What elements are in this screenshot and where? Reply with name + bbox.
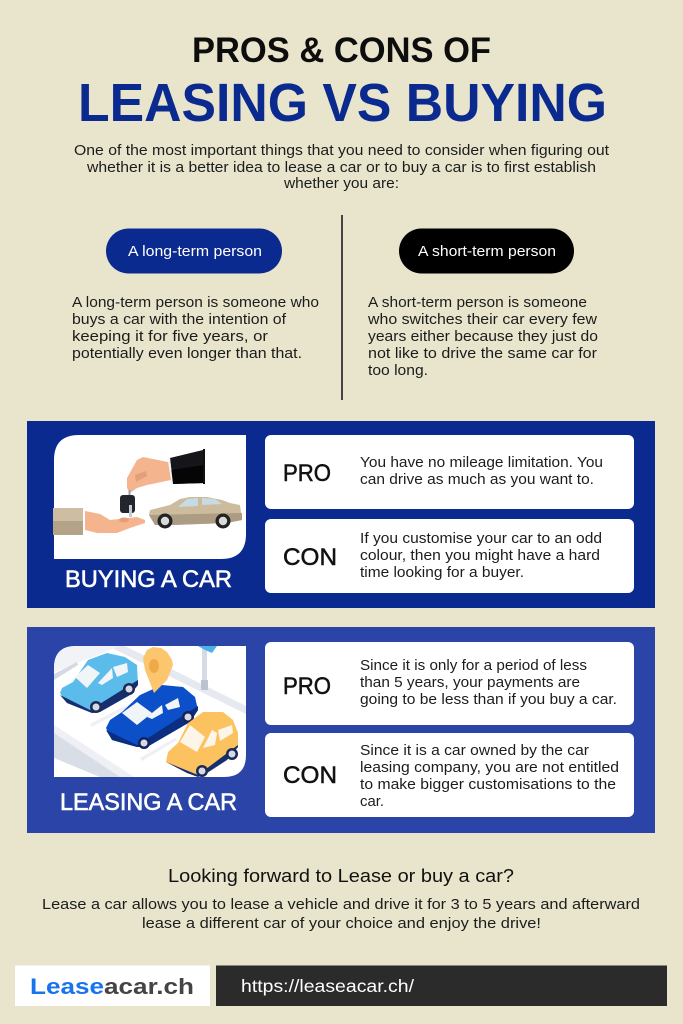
car — [149, 497, 242, 528]
card: leasing con: leasing company, you are not entitled — [360, 760, 619, 776]
panel heading: BUYING A CAR — [65, 566, 232, 593]
card: leasing pro: Since it is only for a period of less — [360, 658, 587, 674]
website url bar: https://leaseacar.ch/ — [241, 976, 414, 996]
dark blue car — [106, 685, 198, 749]
long-term description: potentially even longer than that. — [72, 345, 302, 362]
closing question: Looking forward to Lease or buy a car? — [168, 866, 514, 886]
card: buying pro: You have no mileage limitation. You — [360, 455, 603, 471]
intro text: One of the most important things that you need to consider when figuring out — [74, 142, 610, 159]
intro text — [74, 142, 610, 192]
column divider — [341, 215, 343, 400]
illustration: parked cars with location pin — [54, 646, 246, 777]
card: buying con: CON — [283, 544, 337, 571]
illustration: hands exchanging car key — [53, 435, 246, 559]
long-term description: A long-term person is someone who — [72, 294, 319, 311]
pill: short-term person — [399, 228, 574, 274]
card: buying con: time looking for a buyer. — [360, 565, 524, 581]
light blue car — [60, 653, 138, 713]
intro text: whether it is a better idea to lease a car or to buy a car is to first establish — [86, 159, 596, 176]
short-term description — [367, 294, 598, 379]
closing text: lease a different car of your choice and enjoy the drive! — [142, 915, 541, 932]
card: buying pro — [265, 435, 634, 509]
card: buying con: colour, then you might have a hard — [360, 548, 600, 564]
panel: buying a car — [27, 421, 655, 608]
yellow car — [166, 712, 238, 777]
long-term description: buys a car with the intention of — [72, 311, 287, 328]
pill: short-term person: A short-term person — [418, 243, 556, 260]
short-term description: too long. — [368, 362, 428, 379]
card: leasing pro: going to be less than if you buy a car. — [360, 692, 617, 708]
card: leasing con: Since it is a car owned by the car — [360, 743, 589, 759]
title: PROS & CONS OF — [192, 31, 491, 70]
card: buying pro: can drive as much as you want to. — [360, 472, 594, 488]
card: leasing pro: PRO — [283, 673, 331, 700]
card: leasing con: car. — [360, 794, 384, 810]
card: leasing con: CON — [283, 762, 337, 789]
location pin — [143, 647, 173, 693]
card: buying pro: PRO — [283, 460, 331, 487]
title — [78, 31, 607, 133]
short-term description: who switches their car every few — [367, 311, 597, 328]
intro text: whether you are: — [283, 175, 399, 192]
closing text: Lease a car allows you to lease a vehicle and drive it for 3 to 5 years and afterward — [42, 896, 640, 913]
card: leasing con: to make bigger customisations to the — [360, 777, 616, 793]
card: buying con: If you customise your car to an odd — [360, 531, 602, 547]
short-term description: not like to drive the same car for — [368, 345, 597, 362]
pill: long-term person: A long-term person — [128, 243, 262, 260]
card: leasing con — [265, 733, 634, 817]
short-term description: years either because they just do — [368, 328, 598, 345]
logo: Leaseacar.ch — [15, 966, 210, 1006]
long-term description — [72, 294, 319, 362]
closing text — [42, 896, 640, 932]
card: buying con — [265, 519, 634, 593]
website url bar — [216, 966, 667, 1006]
long-term description: keeping it for five years, or — [72, 328, 268, 345]
panel heading: LEASING A CAR — [60, 789, 237, 816]
card: leasing pro: than 5 years, your payments are — [360, 675, 580, 691]
card: leasing pro — [265, 642, 634, 725]
short-term description: A short-term person is someone — [368, 294, 587, 311]
pill: long-term person — [106, 228, 282, 274]
logo: Leaseacar.ch: Lease acar.ch — [30, 974, 194, 999]
title: LEASING VS BUYING — [78, 73, 607, 133]
panel: leasing a car — [27, 627, 655, 833]
